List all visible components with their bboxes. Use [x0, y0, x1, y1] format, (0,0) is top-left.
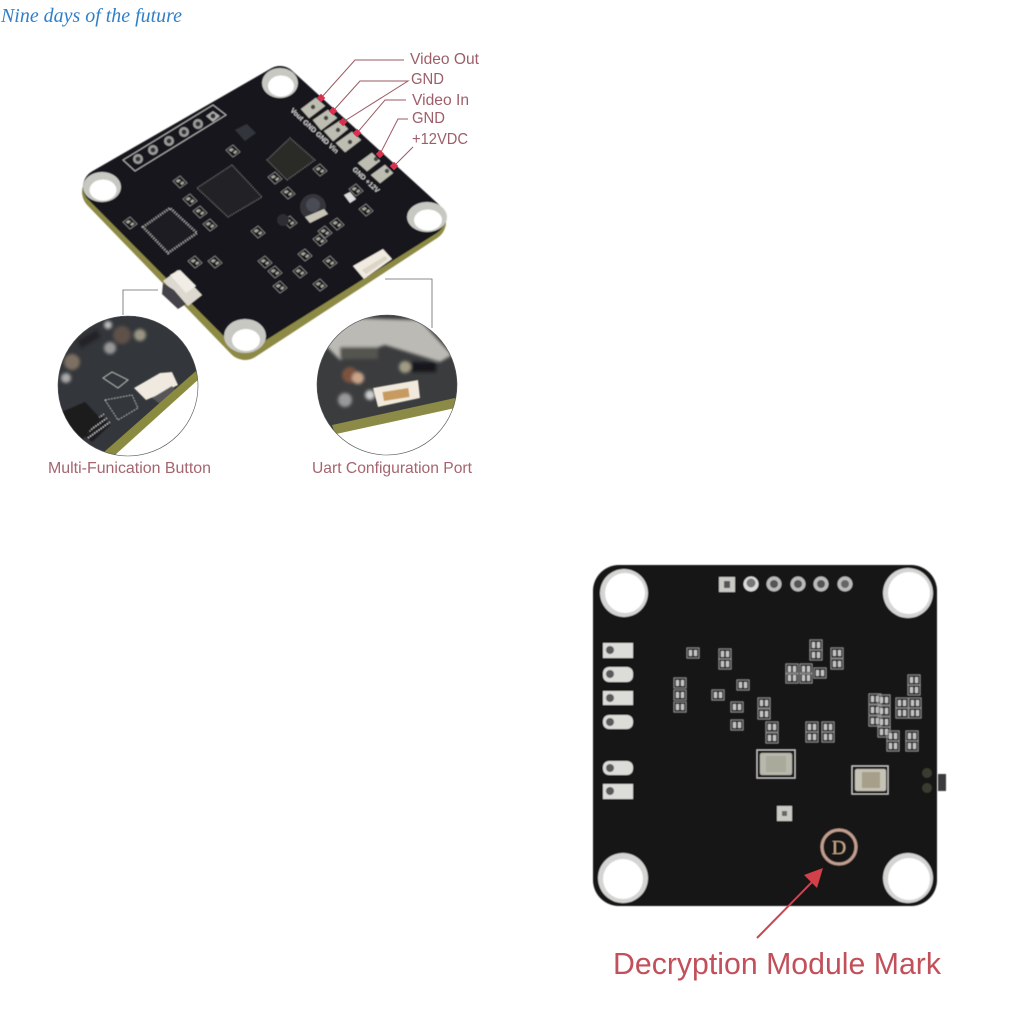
back pin header [719, 576, 852, 592]
label: multi-function button: Multi-Funication Button [48, 460, 211, 477]
solder dots and pad labels [289, 105, 389, 195]
label: Video Out: Video Out [410, 51, 480, 68]
button on board [162, 270, 202, 309]
back surface mount components [674, 640, 921, 751]
board edge [101, 88, 427, 341]
back edge pads [603, 643, 633, 799]
decryption module mark: D [832, 837, 846, 859]
inset: uart port close-up [316, 314, 458, 456]
inset: multi-function button close-up [58, 316, 198, 456]
panel: front of board [83, 68, 447, 353]
inductor right [852, 766, 888, 794]
back mounting holes [598, 568, 933, 903]
label: uart configuration port: Uart Configuration Port [312, 460, 473, 477]
video and power pads [300, 97, 394, 184]
label: GND lower: GND [412, 110, 445, 127]
label: decryption module mark: Decryption Module Mark [613, 946, 941, 981]
back board surface [593, 565, 937, 906]
panel: back of board [593, 565, 946, 906]
solder dots and pad labels: GND +12V [351, 166, 381, 195]
pin callout lines [321, 60, 413, 166]
button bracket line [123, 290, 158, 315]
solder dots and pad labels: Vout GND GND Vin [289, 107, 339, 155]
uart port on board [353, 249, 392, 279]
chips [143, 138, 315, 253]
mounting holes [83, 68, 447, 353]
small pad grid [777, 806, 792, 821]
arrow to decryption mark [757, 868, 823, 938]
side button [922, 768, 946, 793]
label: +12VDC: +12VDC [412, 131, 468, 148]
inductor [300, 194, 328, 223]
pin header [123, 105, 226, 171]
decryption module mark [822, 830, 856, 864]
label: Video In: Video In [412, 92, 469, 109]
title: Nine days of the future [0, 6, 182, 27]
pin callout markers [317, 94, 398, 170]
inductor left [757, 750, 795, 778]
port bracket line [385, 279, 432, 328]
label: GND upper: GND [411, 71, 444, 88]
surface mount components [123, 124, 373, 293]
board surface [101, 84, 427, 332]
